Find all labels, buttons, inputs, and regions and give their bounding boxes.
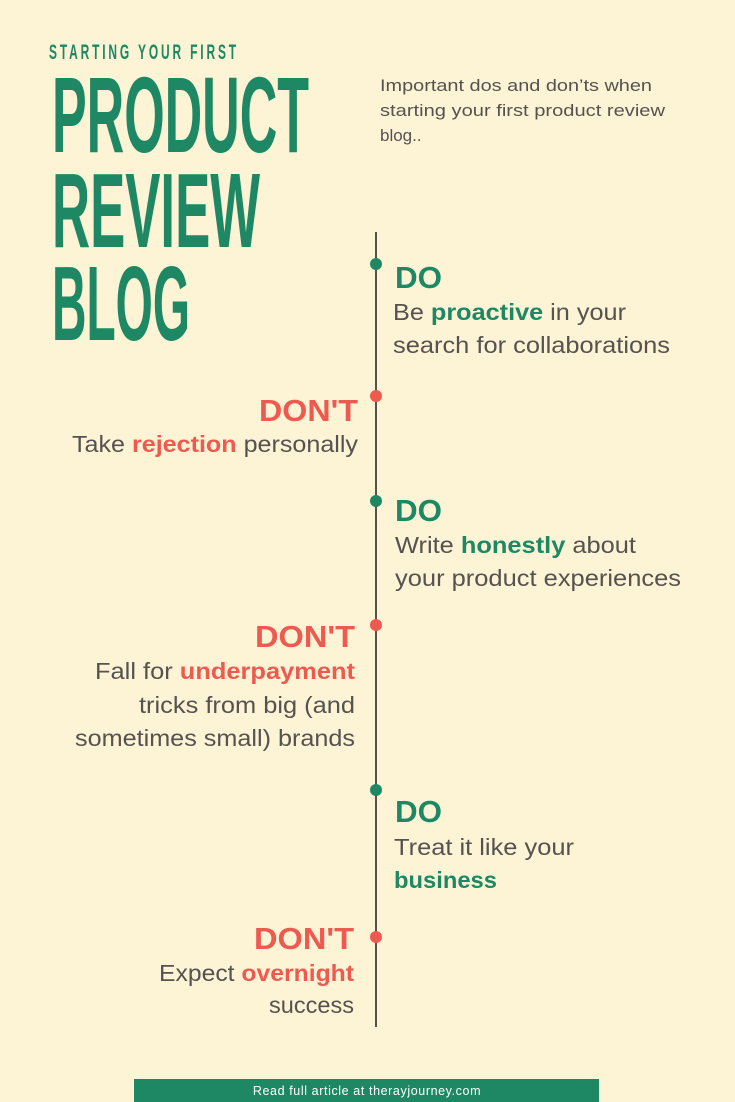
item 4: don't fall for underpayment: sometimes small) brands (75, 725, 355, 751)
subtitle (380, 76, 666, 145)
footer bar: Read full article at therayjourney.com (253, 1084, 481, 1098)
item 2: don't take rejection: Take rejection personally (72, 431, 359, 457)
item 4: don't fall for underpayment: tricks from big (and (139, 692, 355, 718)
item 5: do treat it like business (394, 794, 574, 893)
item 1: do be proactive (393, 260, 670, 358)
title block: REVIEW (52, 152, 260, 270)
item 4: don't fall for underpayment (75, 619, 355, 751)
item 1: do be proactive: search for collaborations (393, 332, 670, 358)
item 2: don't take rejection: DON'T (259, 393, 358, 428)
subtitle: Important dos and don’ts when (380, 76, 652, 95)
item 6: don't expect overnight success: DON'T (254, 921, 354, 956)
item 5: do treat it like business: DO (395, 794, 442, 829)
item 3: do write honestly: your product experiences (395, 565, 681, 591)
text: PRODUCT (52, 54, 309, 175)
item 2: don't take rejection (72, 393, 359, 457)
item 3: do write honestly (395, 493, 681, 591)
timeline (370, 232, 382, 1027)
title block: BLOG (52, 245, 190, 363)
item 4: don't fall for underpayment: DON'T (255, 619, 355, 654)
item 3: do write honestly: DO (395, 493, 442, 528)
item 5: do treat it like business: Treat it like your (394, 834, 574, 860)
subtitle: blog.. (380, 126, 422, 145)
item 1: do be proactive: Be proactive in your (393, 299, 626, 325)
item 4: don't fall for underpayment: Fall for underpayment (95, 658, 355, 684)
item 6: don't expect overnight success: Expect overnight (159, 960, 354, 986)
kicker: starting your first: STARTING YOUR FIRST (49, 41, 239, 64)
item 6: don't expect overnight success: success (269, 992, 354, 1018)
item 3: do write honestly: Write honestly about (395, 532, 637, 558)
subtitle: starting your first product review (380, 101, 666, 120)
item 1: do be proactive: DO (395, 260, 442, 295)
footer bar (134, 1079, 599, 1102)
item 5: do treat it like business: business (394, 867, 497, 893)
item 6: don't expect overnight success (159, 921, 354, 1018)
title block (49, 41, 309, 363)
